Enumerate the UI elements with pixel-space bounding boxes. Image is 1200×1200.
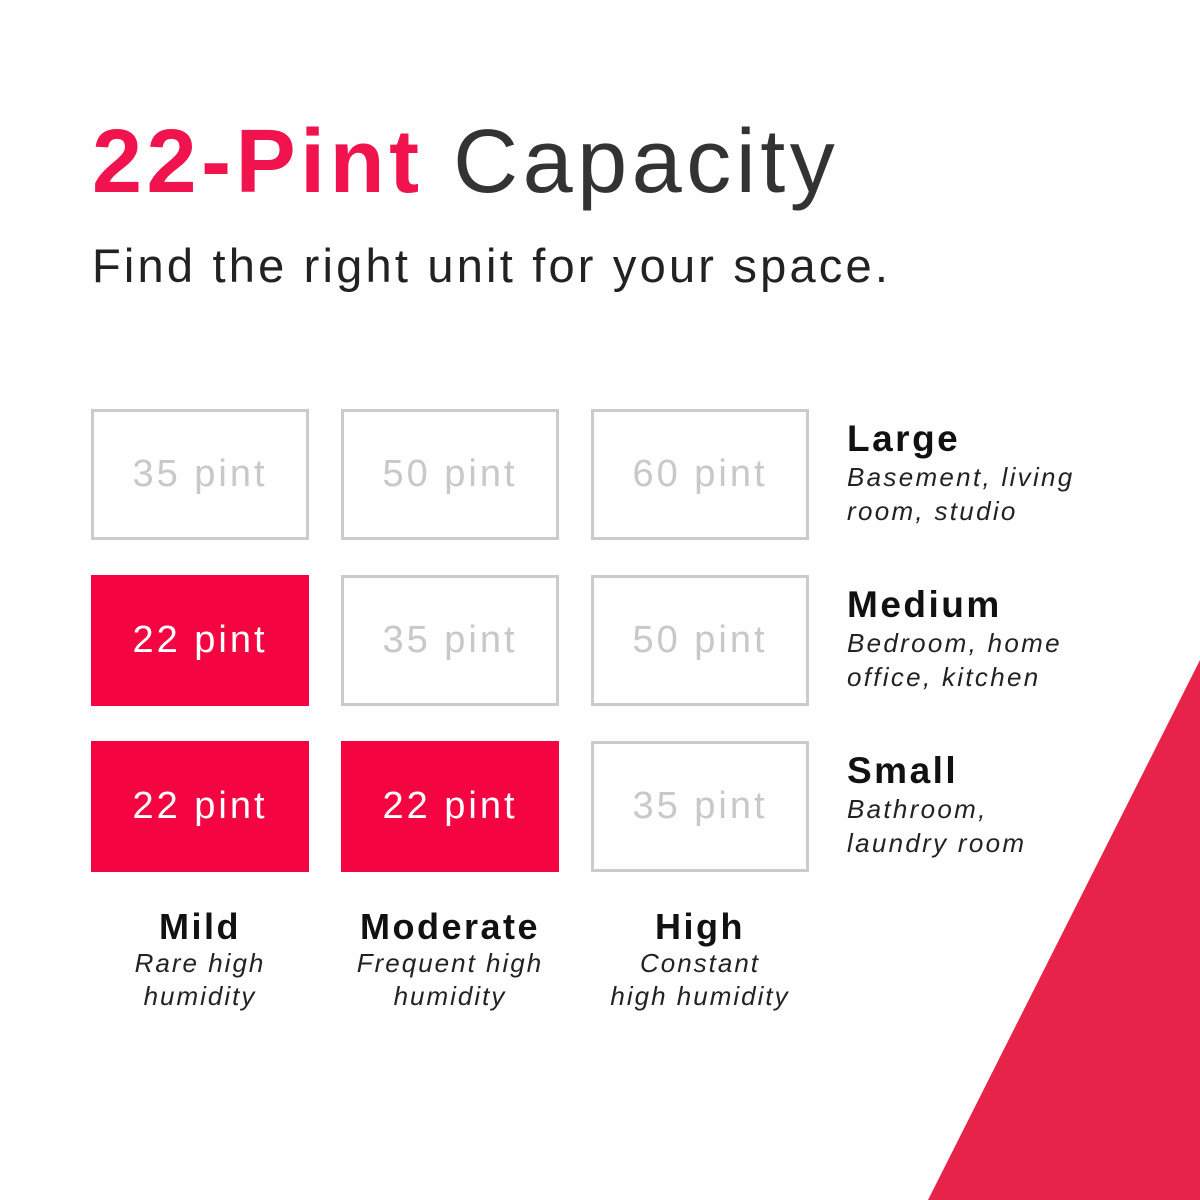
row label: large: room, studio: [847, 496, 1018, 526]
row medium: [91, 575, 309, 706]
row label: small: Bathroom,: [847, 794, 988, 824]
row small: 22 pint: [132, 785, 268, 827]
grid: 35 pint: [382, 619, 518, 661]
grid: 22 pint: [382, 785, 518, 827]
grid: 50 pint: [632, 619, 768, 661]
row label: medium: Medium: [847, 584, 1002, 625]
column label: moderate: Frequent high: [357, 948, 543, 978]
column label: moderate: [357, 906, 543, 1011]
row label: small: Small: [847, 750, 958, 791]
row small: [91, 741, 309, 872]
grid: 50 pint: [382, 453, 518, 495]
row label: small: [847, 750, 1026, 858]
column label: mild: Mild: [159, 906, 241, 947]
column label: mild: Rare high: [135, 948, 265, 978]
row large: [91, 409, 309, 540]
column label: high: [610, 906, 790, 1011]
column label: mild: humidity: [144, 981, 256, 1011]
column label: high: High: [655, 906, 745, 947]
row label: small: laundry room: [847, 828, 1026, 858]
column label: moderate: humidity: [394, 981, 506, 1011]
row label: large: Large: [847, 418, 960, 459]
column label: moderate: Moderate: [360, 906, 540, 947]
grid: [91, 409, 809, 872]
column label: high: high humidity: [610, 981, 790, 1011]
grid: 60 pint: [632, 453, 768, 495]
row label: large: Basement, living: [847, 462, 1075, 492]
row label: medium: [847, 584, 1062, 692]
column label: mild: [135, 906, 265, 1011]
row label: medium: Bedroom, home: [847, 628, 1062, 658]
grid: 35 pint: [632, 785, 768, 827]
subtitle: Find the right unit for your space.: [92, 239, 891, 292]
row label: medium: office, kitchen: [847, 662, 1040, 692]
row label: large: [847, 418, 1075, 526]
column label: high: Constant: [640, 948, 760, 978]
row large: 35 pint: [132, 453, 268, 495]
title: 22-Pint Capacity: [92, 112, 839, 212]
row medium: 22 pint: [132, 619, 268, 661]
